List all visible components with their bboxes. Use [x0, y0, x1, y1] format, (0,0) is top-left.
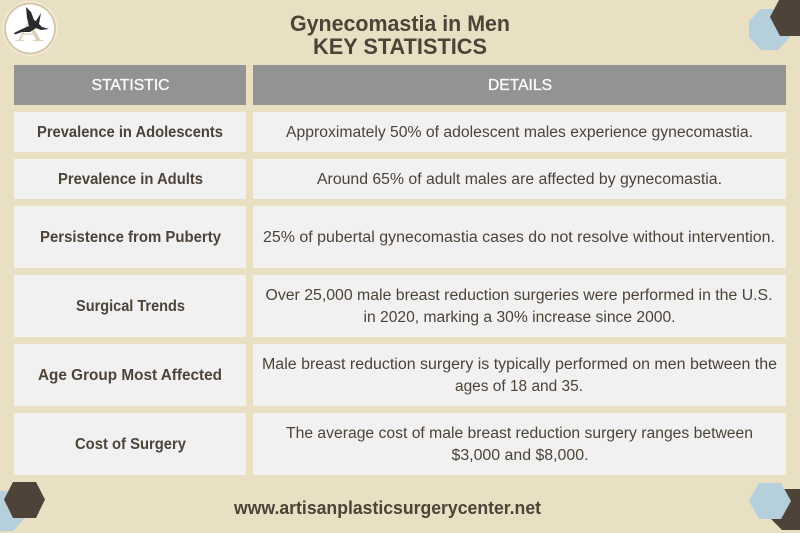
row: cost of surgery: The average cost of male breast reduction surgery ranges between — [286, 425, 753, 442]
row: surgical trends — [14, 275, 786, 337]
table header: statistic: STATISTIC — [92, 77, 170, 94]
row: persistence from puberty: 25% of pubertal gynecomastia cases do not resolve without intervention. — [263, 229, 775, 246]
title: KEY STATISTICS — [313, 34, 487, 59]
icon: logo badge — [2, 1, 58, 56]
row: cost of surgery: $3,000 and $8,000. — [452, 447, 588, 464]
row: surgical trends: in 2020, marking a 30% increase since 2000. — [364, 309, 676, 326]
row: persistence from puberty: Persistence from Puberty — [40, 229, 221, 246]
icon: bottom-right dark hexagon — [770, 489, 800, 530]
table header: details: DETAILS — [488, 77, 552, 94]
row: age group most affected: Male breast reduction surgery is typically performed on men between the — [262, 356, 777, 373]
title — [290, 11, 510, 59]
icon: bottom-left dark hexagon — [4, 482, 45, 518]
row: age group most affected — [14, 344, 786, 406]
icon: top-right blue octagon — [749, 9, 790, 50]
table header: statistic — [14, 65, 246, 105]
title: Gynecomastia in Men — [290, 11, 510, 36]
icon: bottom-right blue hexagon — [749, 483, 791, 519]
table header: details — [253, 65, 786, 105]
footer website: www.artisanplasticsurgerycenter.net — [233, 497, 541, 518]
row: age group most affected: Age Group Most Affected — [38, 367, 222, 384]
row: age group most affected: ages of 18 and 35. — [455, 378, 583, 395]
icon: logo badge: A — [15, 17, 45, 47]
row: prevalence in adolescents: Approximately 50% of adolescent males experience gynecomastia. — [286, 124, 753, 141]
row: surgical trends: Surgical Trends — [76, 298, 185, 315]
row: prevalence in adults: Prevalence in Adults — [58, 171, 203, 188]
icon: top-right dark hexagon — [770, 0, 800, 36]
row: surgical trends: Over 25,000 male breast reduction surgeries were performed in the U.S. — [266, 287, 772, 304]
row: prevalence in adolescents — [14, 112, 786, 152]
row: persistence from puberty — [14, 206, 786, 268]
row: prevalence in adults: Around 65% of adult males are affected by gynecomastia. — [317, 171, 722, 188]
icon: bottom-left blue hexagon — [0, 491, 24, 531]
row: prevalence in adolescents: Prevalence in Adolescents — [37, 124, 223, 141]
row: cost of surgery — [14, 413, 786, 475]
row: prevalence in adults — [14, 159, 786, 199]
row: cost of surgery: Cost of Surgery — [75, 436, 186, 453]
table: key statistics — [14, 65, 786, 475]
